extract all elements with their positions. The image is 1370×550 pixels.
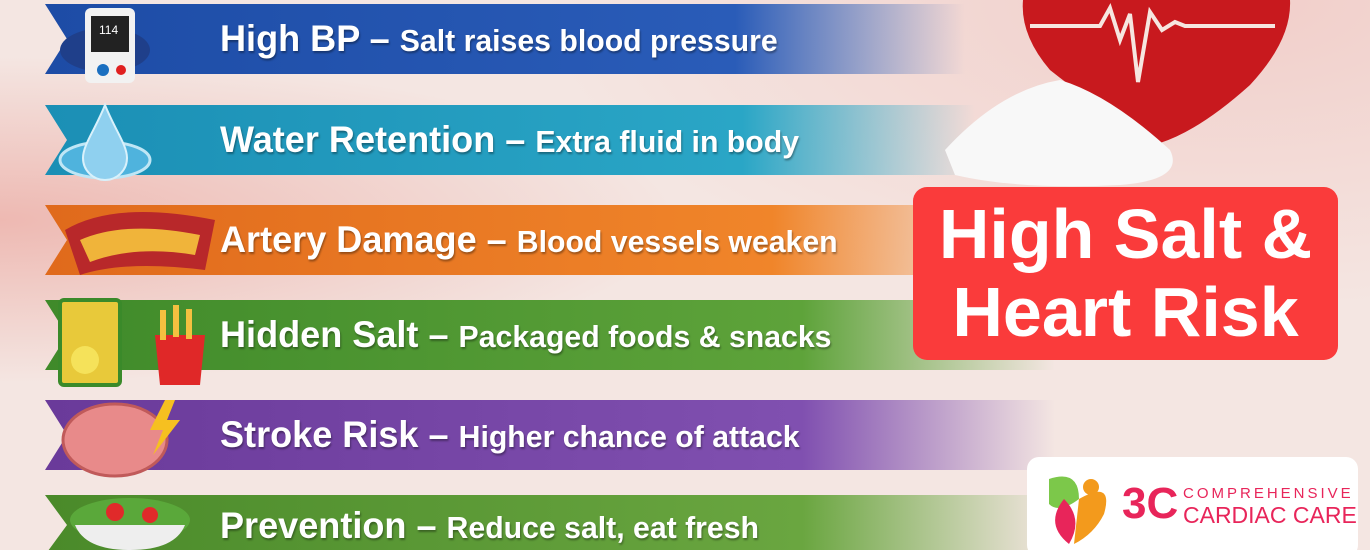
icon: artery <box>65 212 215 275</box>
banner: artery damage: Artery Damage – Blood vessels weaken <box>220 219 838 260</box>
logo: CARDIAC CARE <box>1183 502 1357 528</box>
icon: BP monitor: 114 <box>99 23 118 37</box>
icon: brain <box>62 400 180 478</box>
illustration: heart with salt <box>945 0 1290 186</box>
banner: prevention: Prevention – Reduce salt, eat fresh <box>220 505 759 546</box>
logo text: 3C <box>1122 479 1178 528</box>
icon: BP monitor <box>60 8 150 83</box>
banner: water retention <box>45 105 975 175</box>
title box <box>913 187 1338 360</box>
icon: logo mark <box>1049 476 1106 544</box>
logo <box>1027 457 1358 550</box>
banner: hidden salt <box>45 300 1055 370</box>
icon: snacks <box>58 298 205 387</box>
title box: Heart Risk <box>952 273 1299 351</box>
logo: COMPREHENSIVE <box>1183 485 1354 502</box>
icon: salad <box>70 498 190 550</box>
banner: prevention <box>45 495 1055 550</box>
icon: water drop <box>58 102 152 181</box>
banner: water retention: Water Retention – Extra fluid in body <box>220 119 799 160</box>
banner: high BP <box>45 4 965 74</box>
banner: high BP: High BP – Salt raises blood pressure <box>220 18 778 59</box>
title box: High Salt & <box>939 195 1312 273</box>
banner: hidden salt: Hidden Salt – Packaged foods & snacks <box>220 314 831 355</box>
banner: stroke risk: Stroke Risk – Higher chance of attack <box>220 414 800 455</box>
banner: stroke risk <box>45 400 1055 470</box>
banner: artery damage <box>45 205 913 275</box>
